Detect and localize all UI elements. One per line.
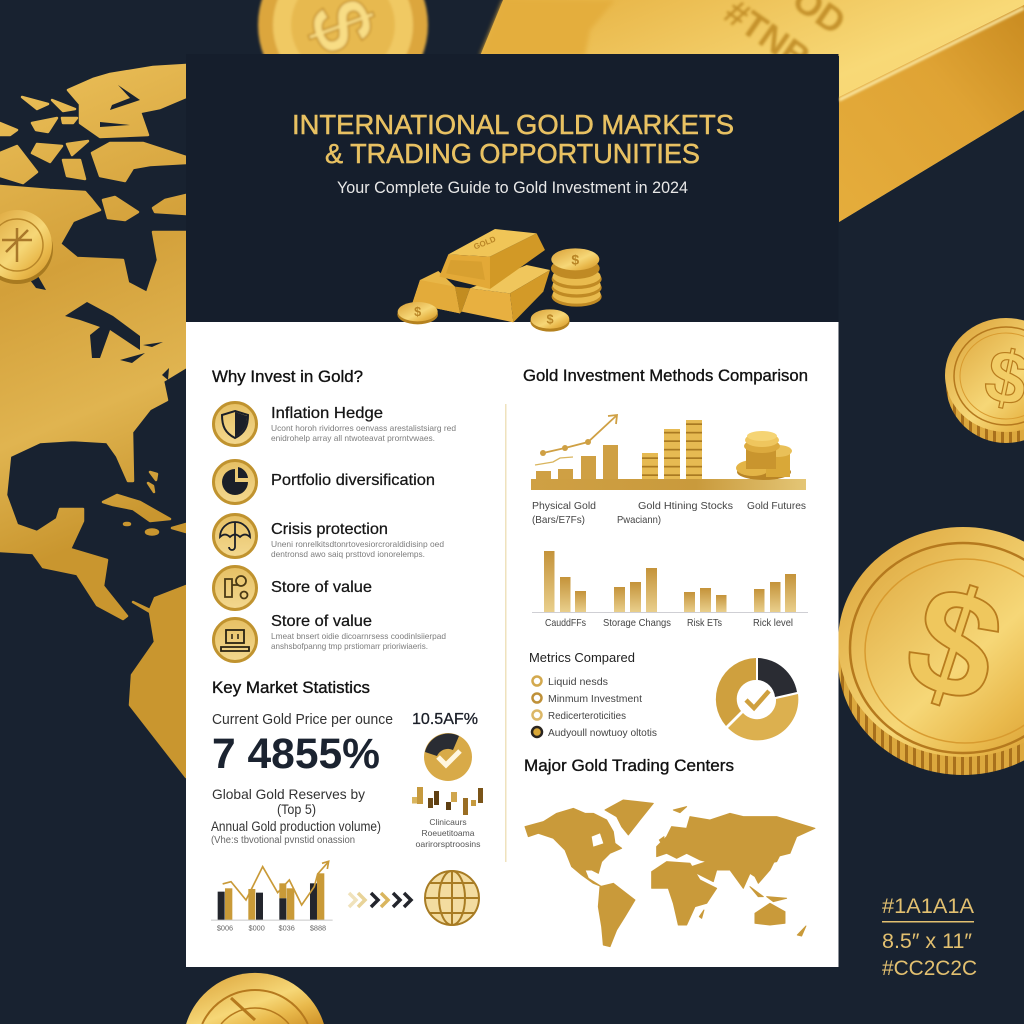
item: inflation hedge: Inflation Hedge — [271, 405, 383, 422]
item: crisis protection: Crisis protection — [271, 521, 388, 538]
arrows — [349, 893, 411, 907]
item: inflation hedge: Ucont horoh rividorres oenvass arestalistsiarg red — [271, 423, 456, 433]
panel: document — [186, 54, 838, 967]
world map — [525, 800, 815, 947]
legend: metrics compared: Redicerteroticities — [548, 711, 626, 722]
section: why invest in gold — [212, 367, 456, 662]
labels: (Bars/E7Fs) — [532, 514, 585, 526]
section: investment methods — [523, 366, 815, 947]
column divider — [505, 404, 506, 862]
chart: annual production — [211, 861, 333, 933]
background world map — [0, 65, 186, 777]
icon: shield — [214, 402, 256, 446]
stat: global reserves: (Top 5) — [277, 801, 316, 817]
map: inland waters — [30, 85, 169, 380]
title: INTERNATIONAL GOLD MARKETS — [292, 109, 734, 140]
coin pile — [736, 431, 792, 480]
chart: annual production: $000 — [249, 924, 265, 933]
legend: metrics compared: Liquid nesds — [548, 677, 608, 688]
stat: global reserves: Annual Gold production volume) — [211, 819, 381, 834]
item: store of value 2: Store of value — [271, 613, 372, 630]
spec notes: #CC2C2C — [882, 956, 977, 980]
chart: grouped bars: Rick level — [753, 617, 793, 629]
coin left: $ — [414, 305, 421, 319]
item: store of value 2: Lmeat bnsert oidie dicoarnrsess coodinlsiierpad — [271, 631, 446, 641]
item: store of value 2: anshsbofpanng tmp prstiomarr prioriwiaeris. — [271, 641, 428, 651]
chart: methods pictogram — [531, 415, 806, 526]
top coin — [258, 0, 428, 110]
legend: metrics compared — [529, 651, 657, 739]
item: store of value: Store of value — [271, 579, 372, 596]
coin stack: $ — [571, 251, 579, 267]
coin stack — [551, 248, 602, 307]
item: crisis protection: Uneni ronrelkitsdtonrtovesiorcroraldidisinp oed — [271, 539, 444, 549]
coin right: $ — [546, 312, 554, 326]
chart: grouped bars: Storage Changs — [603, 617, 671, 629]
item: crisis protection: dentronsd awo saiq prsttovd ionorelemps. — [271, 549, 425, 559]
stat: current gold price: 7 4855% — [212, 730, 380, 778]
item: store of value 2 — [214, 613, 446, 662]
icon: store of value — [214, 566, 256, 610]
stat: global reserves — [211, 786, 381, 846]
item: crisis protection — [214, 514, 444, 559]
item: store of value — [214, 566, 372, 610]
labels: Gold Htining Stocks — [638, 500, 733, 512]
spec notes: #1A1A1A — [882, 894, 975, 918]
mini bar chart — [412, 787, 483, 815]
icon: pie — [214, 460, 256, 504]
spec notes: 8.5″ x 11″ — [882, 929, 972, 953]
heading: Why Invest in Gold? — [212, 367, 363, 386]
stat: global reserves: Global Gold Reserves by — [212, 786, 365, 802]
stat: current gold price: Current Gold Price per ounce — [212, 711, 393, 728]
chart: grouped bars: Risk ETs — [687, 617, 722, 629]
title: & TRADING OPPORTUNITIES — [325, 138, 700, 169]
spec notes — [882, 894, 977, 980]
labels — [532, 500, 806, 526]
stat: global reserves: (Vhe:s tbvotional pvnstid onassion — [211, 835, 355, 846]
section: key market statistics — [211, 678, 483, 933]
heading: Key Market Statistics — [212, 678, 370, 697]
heading: trading centers: Major Gold Trading Centers — [524, 756, 734, 775]
chart: annual production: $006 — [217, 924, 233, 933]
panel: body — [186, 322, 838, 967]
legend: metrics compared: Audyoull nowtuoy oltotis — [548, 728, 657, 739]
legend: metrics compared: Minmum Investment — [548, 694, 642, 705]
big coin, right: $ — [888, 550, 1021, 738]
coin left — [397, 302, 438, 324]
icon: gold bars and coins — [397, 229, 602, 332]
chart: grouped bars: CauddFFs — [545, 617, 586, 629]
item: inflation hedge: enidrohelp array all ntwoteavat prorntvwaes. — [271, 433, 435, 443]
stamped bar text: GOLD — [472, 234, 497, 252]
left coin — [0, 210, 53, 284]
big gold bar, top right — [480, 0, 1024, 222]
panel: header — [186, 54, 838, 322]
chart: annual production: $036 — [279, 924, 295, 933]
caption: mini chart: Clinicaurs — [429, 817, 467, 827]
coin right — [530, 309, 570, 332]
stat: percentage: 10.5AF% — [412, 711, 478, 728]
icon: umbrella — [214, 514, 256, 558]
item: portfolio diversification: Portfolio diversification — [271, 472, 435, 489]
icon: globe — [425, 871, 479, 925]
icon: vault — [214, 618, 256, 662]
chart: annual production: $888 — [310, 924, 326, 933]
labels: Pwaciann) — [617, 514, 661, 526]
title — [292, 109, 734, 169]
caption: mini chart — [416, 817, 480, 849]
chart: grouped bars — [532, 551, 808, 629]
labels: Gold Futures — [747, 500, 806, 512]
coin stacks — [642, 420, 702, 479]
caption: mini chart: Roeuetitoama — [422, 828, 475, 838]
subtitle: Your Complete Guide to Gold Investment in 2024 — [337, 179, 688, 197]
caption: mini chart: oarirorsptroosins — [416, 839, 480, 849]
stat: current gold price — [212, 711, 393, 778]
chart: donut — [716, 658, 798, 740]
small coin, right — [945, 318, 1024, 443]
big coin, right — [838, 527, 1024, 775]
labels: Physical Gold — [532, 500, 596, 512]
item: portfolio diversification — [214, 460, 435, 504]
bottom coin — [186, 973, 324, 1024]
icon: check badge — [424, 733, 472, 781]
legend: metrics compared: Metrics Compared — [529, 651, 635, 665]
heading: Gold Investment Methods Comparison — [523, 366, 808, 385]
item: inflation hedge — [214, 402, 456, 446]
